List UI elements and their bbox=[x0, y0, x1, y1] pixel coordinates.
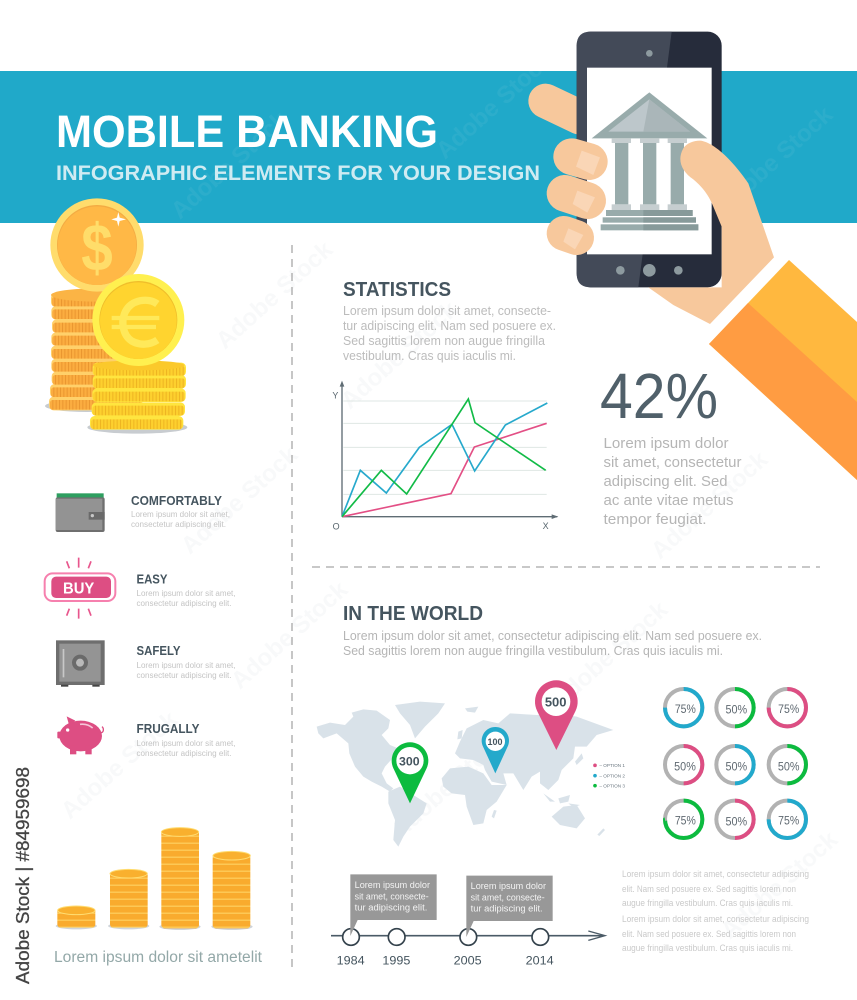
text: Adobe Stock bbox=[546, 596, 674, 714]
donut 75 green: 75% bbox=[675, 814, 696, 828]
donut 50 blue bbox=[716, 746, 754, 783]
shadows bbox=[45, 400, 187, 434]
text: frugally: FRUGALLY bbox=[136, 722, 200, 736]
timeline bbox=[331, 874, 605, 968]
percent text: ac ante vitae metus bbox=[604, 492, 734, 509]
watermark marks: Adobe Stock bbox=[431, 46, 559, 164]
callout 1984: sit amet, consecte- bbox=[355, 891, 429, 901]
dollar coin: $ bbox=[81, 211, 113, 286]
statistics text: vestibulum. Cras quis iaculis mi. bbox=[343, 349, 516, 363]
map legend: – OPTION 3 bbox=[599, 783, 625, 788]
text: frugally: consectetur adipiscing elit. bbox=[136, 749, 232, 758]
text: safely: SAFELY bbox=[136, 644, 181, 658]
donut 75 pink: 75% bbox=[778, 702, 799, 716]
callout 1984: Lorem ipsum dolor bbox=[355, 880, 430, 890]
text: safely: Lorem ipsum dolor sit amet, bbox=[136, 661, 236, 670]
euro coin bbox=[92, 274, 184, 366]
text: Adobe Stock bbox=[336, 296, 464, 414]
world text: Sed sagittis lorem non augue fringilla vestibulum. Cras quis iaculis mi. bbox=[343, 644, 723, 658]
donut charts bbox=[665, 689, 806, 838]
coin bar chart bbox=[56, 828, 253, 930]
donut 75 blue bbox=[665, 689, 702, 726]
statistics text: tur adipiscing elit. Nam sed posuere ex. bbox=[343, 319, 556, 333]
feature list bbox=[45, 493, 115, 754]
watermark marks: Adobe Stock bbox=[711, 101, 839, 219]
text: comfortably bbox=[131, 494, 230, 529]
text: Adobe Stock bbox=[211, 236, 339, 354]
donut 50 green bbox=[716, 689, 754, 726]
donut 50 pink: 50% bbox=[674, 760, 696, 774]
icon: buy button: BUY bbox=[63, 580, 94, 597]
pin: 300 bbox=[392, 742, 428, 803]
right text block: Lorem ipsum dolor sit amet, consectetur adipiscing bbox=[622, 869, 809, 879]
callout 1984 bbox=[350, 874, 437, 936]
icon: wallet bbox=[56, 493, 105, 532]
pin: 300: 300 bbox=[399, 755, 420, 769]
dollar coin bbox=[50, 198, 144, 292]
icon: buy button bbox=[45, 558, 115, 619]
text: Adobe Stock bbox=[226, 576, 354, 694]
text: safely: consectetur adipiscing elit. bbox=[136, 671, 232, 680]
right text block: elit. Nam sed posuere ex. Sed sagittis lorem non bbox=[622, 884, 796, 894]
pin: 500 bbox=[535, 680, 578, 750]
donut 50 green bbox=[769, 746, 806, 783]
text: comfortably: Lorem ipsum dolor sit amet, bbox=[131, 510, 230, 519]
percent text: Lorem ipsum dolor bbox=[604, 435, 729, 452]
text: frugally bbox=[136, 722, 236, 758]
pin: 100 bbox=[482, 727, 509, 773]
donut 75 blue lower bbox=[769, 801, 806, 838]
callout 2005: Lorem ipsum dolor bbox=[471, 881, 546, 891]
donut 50 pink bbox=[665, 746, 702, 783]
stock id: Adobe Stock | #84959698 bbox=[13, 767, 33, 984]
line chart: O bbox=[333, 522, 340, 532]
donut 50 blue: 50% bbox=[725, 760, 747, 774]
percent text: tempor feugiat. bbox=[604, 511, 706, 528]
percent text: adipiscing elit. Sed bbox=[604, 473, 728, 490]
percent text: sit amet, consectetur bbox=[604, 454, 742, 471]
world text: Lorem ipsum dolor sit amet, consectetur adipiscing elit. Nam sed posuere ex. bbox=[343, 629, 762, 643]
text: Adobe Stock bbox=[56, 706, 184, 824]
line chart: X bbox=[543, 521, 549, 531]
donut 50 green: 50% bbox=[725, 703, 747, 717]
right text block: elit. Nam sed posuere ex. Sed sagittis lorem non bbox=[622, 929, 796, 939]
text: frugally: Lorem ipsum dolor sit amet, bbox=[136, 739, 236, 748]
text: easy: EASY bbox=[136, 572, 168, 586]
icon: safe bbox=[56, 640, 105, 687]
text: easy: Lorem ipsum dolor sit amet, bbox=[136, 589, 236, 598]
percent text bbox=[604, 435, 742, 528]
line chart: Y bbox=[332, 390, 338, 400]
subtitle: INFOGRAPHIC ELEMENTS FOR YOUR DESIGN bbox=[56, 162, 540, 185]
timeline markers bbox=[343, 929, 549, 945]
timeline years: 2005 bbox=[454, 954, 482, 968]
timeline years: 2014 bbox=[526, 954, 554, 968]
statistics text: Lorem ipsum dolor sit amet, consecte- bbox=[343, 304, 551, 318]
index finger behind phone bbox=[546, 101, 580, 117]
left coin stack bbox=[49, 288, 145, 410]
right text block bbox=[622, 869, 809, 953]
map legend: – OPTION 2 bbox=[599, 773, 625, 778]
text: Adobe Stock bbox=[716, 826, 844, 944]
donut 75 blue lower: 75% bbox=[778, 814, 799, 828]
header banner bbox=[0, 71, 857, 223]
title: MOBILE BANKING bbox=[56, 106, 438, 157]
watermark marks: Adobe Stock bbox=[166, 106, 294, 224]
donut 75 green bbox=[665, 801, 702, 838]
map bbox=[317, 702, 613, 847]
phone bbox=[577, 32, 722, 287]
donut 75 pink bbox=[769, 689, 806, 726]
line chart bbox=[332, 381, 558, 532]
illustration: hand holding phone with bank bbox=[546, 32, 774, 324]
pin: 500: 500 bbox=[545, 695, 567, 710]
text: Adobe Stock bbox=[386, 726, 514, 844]
text: easy: consectetur adipiscing elit. bbox=[136, 599, 232, 608]
heading: in the world: IN THE WORLD bbox=[343, 603, 483, 625]
statistics text bbox=[343, 304, 556, 363]
coin chart caption: Lorem ipsum dolor sit ametelit bbox=[54, 949, 263, 966]
donut 50 pink lower: 50% bbox=[725, 814, 747, 828]
right text block: augue fringilla vestibulum. Cras quis iaculis mi. bbox=[622, 898, 793, 908]
map legend: – OPTION 1 bbox=[599, 763, 625, 768]
timeline years: 1995 bbox=[382, 954, 411, 968]
dashed dividers bbox=[292, 245, 820, 970]
fingers bbox=[563, 151, 600, 249]
heading: statistics: STATISTICS bbox=[343, 279, 451, 301]
map legend bbox=[593, 763, 625, 788]
right text block: Lorem ipsum dolor sit amet, consectetur adipiscing bbox=[622, 914, 809, 924]
callout 2005: tur adipiscing elit. bbox=[471, 904, 543, 914]
text: comfortably: consectetur adipiscing elit. bbox=[131, 520, 226, 529]
big percent: 42% bbox=[600, 360, 718, 432]
right text block: augue fringilla vestibulum. Cras quis iaculis mi. bbox=[622, 943, 793, 953]
icon: coin stacks with dollar and euro bbox=[45, 198, 187, 434]
icon: piggy bank bbox=[57, 716, 103, 754]
watermark marks bbox=[166, 46, 839, 224]
callout 2005: sit amet, consecte- bbox=[471, 892, 545, 902]
text: Adobe Stock bbox=[176, 441, 304, 559]
sleeve bbox=[709, 260, 857, 480]
text: comfortably: COMFORTABLY bbox=[131, 494, 223, 508]
text: safely bbox=[136, 644, 236, 680]
donut 50 pink lower bbox=[716, 801, 754, 838]
text: Adobe Stock bbox=[646, 446, 774, 564]
donut 50 green: 50% bbox=[778, 760, 800, 774]
hand palm and thumb bbox=[648, 141, 774, 324]
axis arrow bbox=[331, 931, 605, 940]
donut 75 blue: 75% bbox=[675, 702, 696, 716]
callout 2005 bbox=[466, 876, 553, 937]
world map with pins bbox=[317, 680, 625, 847]
pin: 100: 100 bbox=[487, 737, 502, 747]
right coin stack bbox=[90, 360, 186, 430]
text: easy bbox=[136, 572, 236, 608]
world text bbox=[343, 629, 762, 658]
callout 1984: tur adipiscing elit. bbox=[355, 903, 427, 913]
timeline years: 1984 bbox=[337, 954, 365, 968]
icon: bank building bbox=[592, 92, 707, 230]
statistics text: Sed sagittis lorem non augue fringilla bbox=[343, 334, 545, 348]
timeline years bbox=[337, 954, 554, 968]
